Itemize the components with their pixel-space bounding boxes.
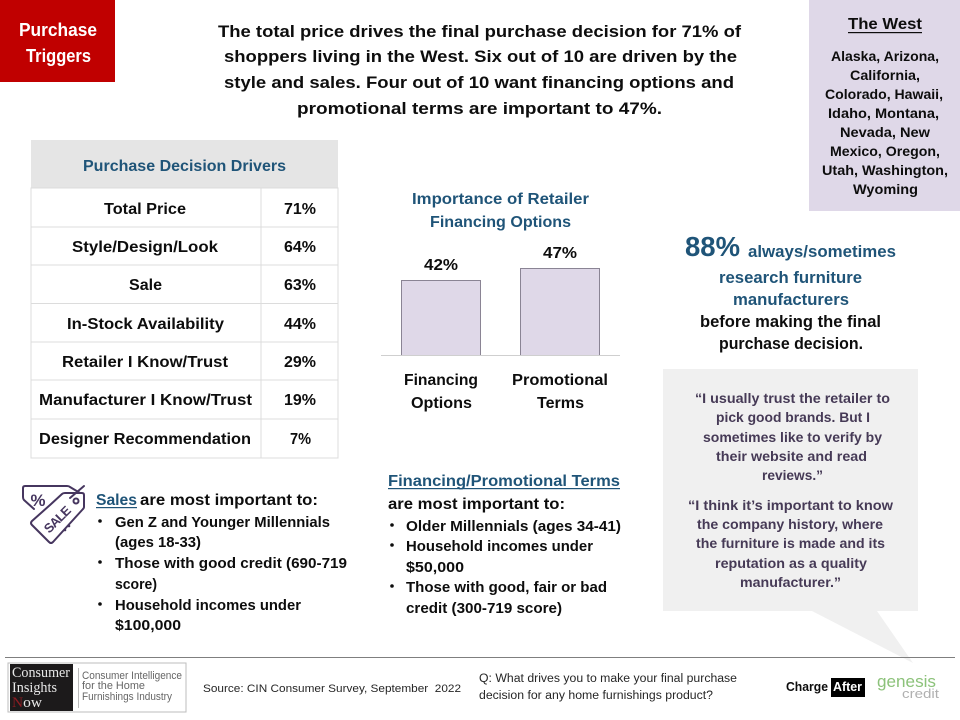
survey question note: decision for any home furnishings product?: [479, 690, 713, 702]
table: purchase decision drivers: 63%: [284, 277, 316, 294]
text block: financing and promotional terms most important to: are most important to:: [388, 496, 565, 513]
text block: financing and promotional terms most important to: [388, 473, 621, 617]
heading: summary statement: promotional terms are important to 47%.: [297, 99, 662, 118]
panel: the West region list: Nevada, New: [840, 125, 931, 140]
panel: shopper quotes speech bubble: the company history, where: [697, 516, 883, 532]
panel: purchase triggers tag: Purchase: [19, 20, 97, 40]
panel: shopper quotes speech bubble: the furniture is made and its: [696, 535, 885, 551]
logo: Genesis Credit: genesis: [877, 672, 936, 691]
text block: financing and promotional terms most important to: Financing/Promotional Terms: [388, 473, 620, 490]
panel: shopper quotes speech bubble: “I think it’s important to know: [688, 497, 893, 513]
panel: the West region list: Utah, Washington,: [822, 163, 948, 178]
text block: sales most important to: Sales: [96, 492, 137, 509]
panel: purchase triggers tag: [0, 0, 115, 82]
table: purchase decision drivers: 71%: [284, 201, 316, 218]
heading: summary statement: style and sales. Four out of 10 want financing options and: [224, 73, 734, 92]
callout: 88% research manufacturers: research furniture: [719, 269, 862, 287]
callout: 88% research manufacturers: [685, 231, 896, 353]
logo: Genesis Credit: credit: [902, 686, 939, 701]
text block: sales most important to: score): [115, 577, 157, 593]
bar chart: importance of retailer financing options: [381, 191, 620, 412]
panel: shopper quotes speech bubble: manufacturer.”: [740, 574, 841, 590]
panel: shopper quotes speech bubble: pick good brands. But I: [716, 409, 870, 425]
survey question note: [479, 673, 737, 702]
heading: summary statement: shoppers living in the West. Six out of 10 are driven by the: [224, 47, 737, 66]
heading: summary statement: The total price drives the final purchase decision for 71% of: [218, 22, 741, 41]
callout: 88% research manufacturers: 88%: [685, 231, 740, 262]
bar chart: importance of retailer financing options: Terms: [537, 395, 584, 412]
logo: ChargeAfter: Charge: [786, 680, 828, 694]
bar chart: importance of retailer financing options: 47%: [543, 245, 577, 262]
icon: sale tags: [23, 486, 84, 543]
heading: summary statement: [218, 22, 741, 118]
text block: financing and promotional terms most important to: Older Millennials (ages 34-41): [406, 519, 621, 535]
bar chart: importance of retailer financing options: Promotional: [512, 372, 608, 389]
table: purchase decision drivers: Designer Recommendation: [39, 431, 251, 448]
icon: sale tags: %: [30, 491, 46, 510]
table: purchase decision drivers: 19%: [284, 392, 316, 409]
logo: Consumer Insights Now: Insights: [12, 680, 57, 696]
panel: shopper quotes speech bubble: [663, 369, 918, 663]
table: purchase decision drivers: Total Price: [104, 201, 186, 218]
text block: sales most important to: Those with good credit (690-719: [115, 556, 347, 572]
panel: the West region list: The West: [848, 16, 923, 33]
panel: the West region list: California,: [850, 68, 920, 83]
table: purchase decision drivers: 29%: [284, 354, 316, 371]
table: purchase decision drivers: 44%: [284, 316, 316, 333]
text block: financing and promotional terms most important to: Those with good, fair or bad: [406, 580, 607, 596]
logo: Consumer Insights Now: Consumer Intelligence: [82, 670, 182, 682]
bar chart: importance of retailer financing options: Financing Options: [430, 214, 571, 231]
bar chart: importance of retailer financing options: Options: [411, 395, 472, 412]
panel: the West region list: Wyoming: [853, 182, 918, 197]
survey question note: Q: What drives you to make your final purchase: [479, 673, 737, 685]
bar chart: importance of retailer financing options: 42%: [424, 257, 458, 274]
text block: sales most important to: [96, 492, 347, 634]
panel: the West region list: Alaska, Arizona,: [831, 49, 939, 64]
text block: financing and promotional terms most important to: $50,000: [406, 560, 464, 576]
panel: the West region list: Colorado, Hawaii,: [825, 87, 943, 102]
text block: financing and promotional terms most important to: Household incomes under: [406, 539, 593, 555]
text block: financing and promotional terms most important to: credit (300-719 score): [406, 601, 562, 617]
callout: 88% research manufacturers: always/sometimes: [748, 243, 896, 261]
panel: shopper quotes speech bubble: reviews.”: [762, 467, 823, 483]
text block: sales most important to: Household incomes under: [115, 598, 301, 614]
logo: ChargeAfter: After: [833, 680, 862, 694]
panel: shopper quotes speech bubble: their website and read: [716, 448, 867, 464]
logo: Genesis Credit: [877, 672, 939, 701]
table: purchase decision drivers: Retailer I Know/Trust: [62, 354, 229, 371]
callout: 88% research manufacturers: manufacturers: [733, 291, 849, 309]
table: purchase decision drivers: Manufacturer I Know/Trust: [39, 392, 253, 409]
panel: the West region list: [809, 0, 960, 211]
logo: ChargeAfter: [786, 678, 865, 697]
text block: sales most important to: $100,000: [115, 618, 181, 634]
panel: the West region list: Mexico, Oregon,: [830, 144, 940, 159]
callout: 88% research manufacturers: before making the final: [700, 313, 881, 331]
text block: sales most important to: are most important to:: [140, 492, 318, 509]
table: purchase decision drivers: [31, 140, 338, 458]
table: purchase decision drivers: 7%: [290, 431, 311, 448]
table: purchase decision drivers: In-Stock Availability: [67, 316, 224, 333]
bar chart: importance of retailer financing options: Importance of Retailer: [412, 191, 589, 208]
text block: sales most important to: Gen Z and Younger Millennials: [115, 515, 330, 531]
panel: purchase triggers tag: Triggers: [26, 46, 91, 66]
logo: Consumer Insights Now: [8, 663, 186, 712]
logo: Consumer Insights Now: Consumer: [12, 665, 70, 681]
table: purchase decision drivers: Purchase Decision Drivers: [83, 158, 286, 175]
bar chart: importance of retailer financing options: Financing: [404, 372, 478, 389]
logo: Consumer Insights Now: Now: [12, 695, 43, 711]
callout: 88% research manufacturers: purchase decision.: [719, 335, 863, 353]
source note: Source: CIN Consumer Survey, September 2022: [203, 683, 461, 695]
table: purchase decision drivers: Style/Design/Look: [72, 239, 218, 256]
text block: sales most important to: (ages 18-33): [115, 535, 201, 551]
table: purchase decision drivers: 64%: [284, 239, 316, 256]
table: purchase decision drivers: Sale: [129, 277, 162, 294]
icon: sale tags: SALE: [41, 503, 74, 536]
panel: the West region list: Idaho, Montana,: [828, 106, 939, 121]
panel: shopper quotes speech bubble: sometimes like to verify by: [703, 429, 882, 445]
panel: shopper quotes speech bubble: reputation as a quality: [715, 555, 867, 571]
panel: shopper quotes speech bubble: “I usually trust the retailer to: [695, 390, 890, 406]
logo: Consumer Insights Now: Furnishings Industry: [82, 691, 172, 703]
logo: Consumer Insights Now: for the Home: [82, 680, 145, 692]
